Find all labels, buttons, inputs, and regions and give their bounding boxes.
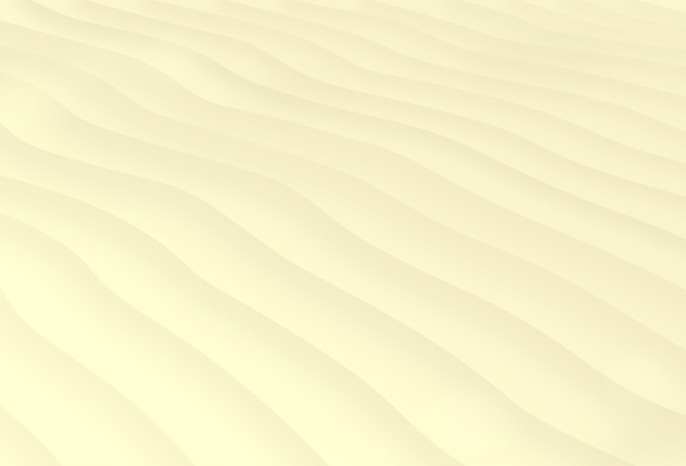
- dune band 7: [224, 0, 684, 134]
- soft shaded hollows: [240, 40, 686, 463]
- dune band 16: [0, 214, 329, 466]
- dune band 18: [0, 406, 62, 466]
- dune band 15: [0, 176, 465, 466]
- dune band 1: [636, 0, 686, 16]
- dune band 11: [0, 20, 686, 301]
- dune band 17: [0, 287, 196, 466]
- dune band 8: [148, 0, 686, 166]
- dune band 6: [290, 0, 683, 98]
- dune band 13: [52, 103, 686, 428]
- dune band 12: [0, 56, 686, 362]
- dune band 14: [0, 122, 635, 466]
- dune band 10: [22, 0, 686, 248]
- dune band 5: [372, 0, 488, 37]
- dune band 9: [78, 0, 686, 204]
